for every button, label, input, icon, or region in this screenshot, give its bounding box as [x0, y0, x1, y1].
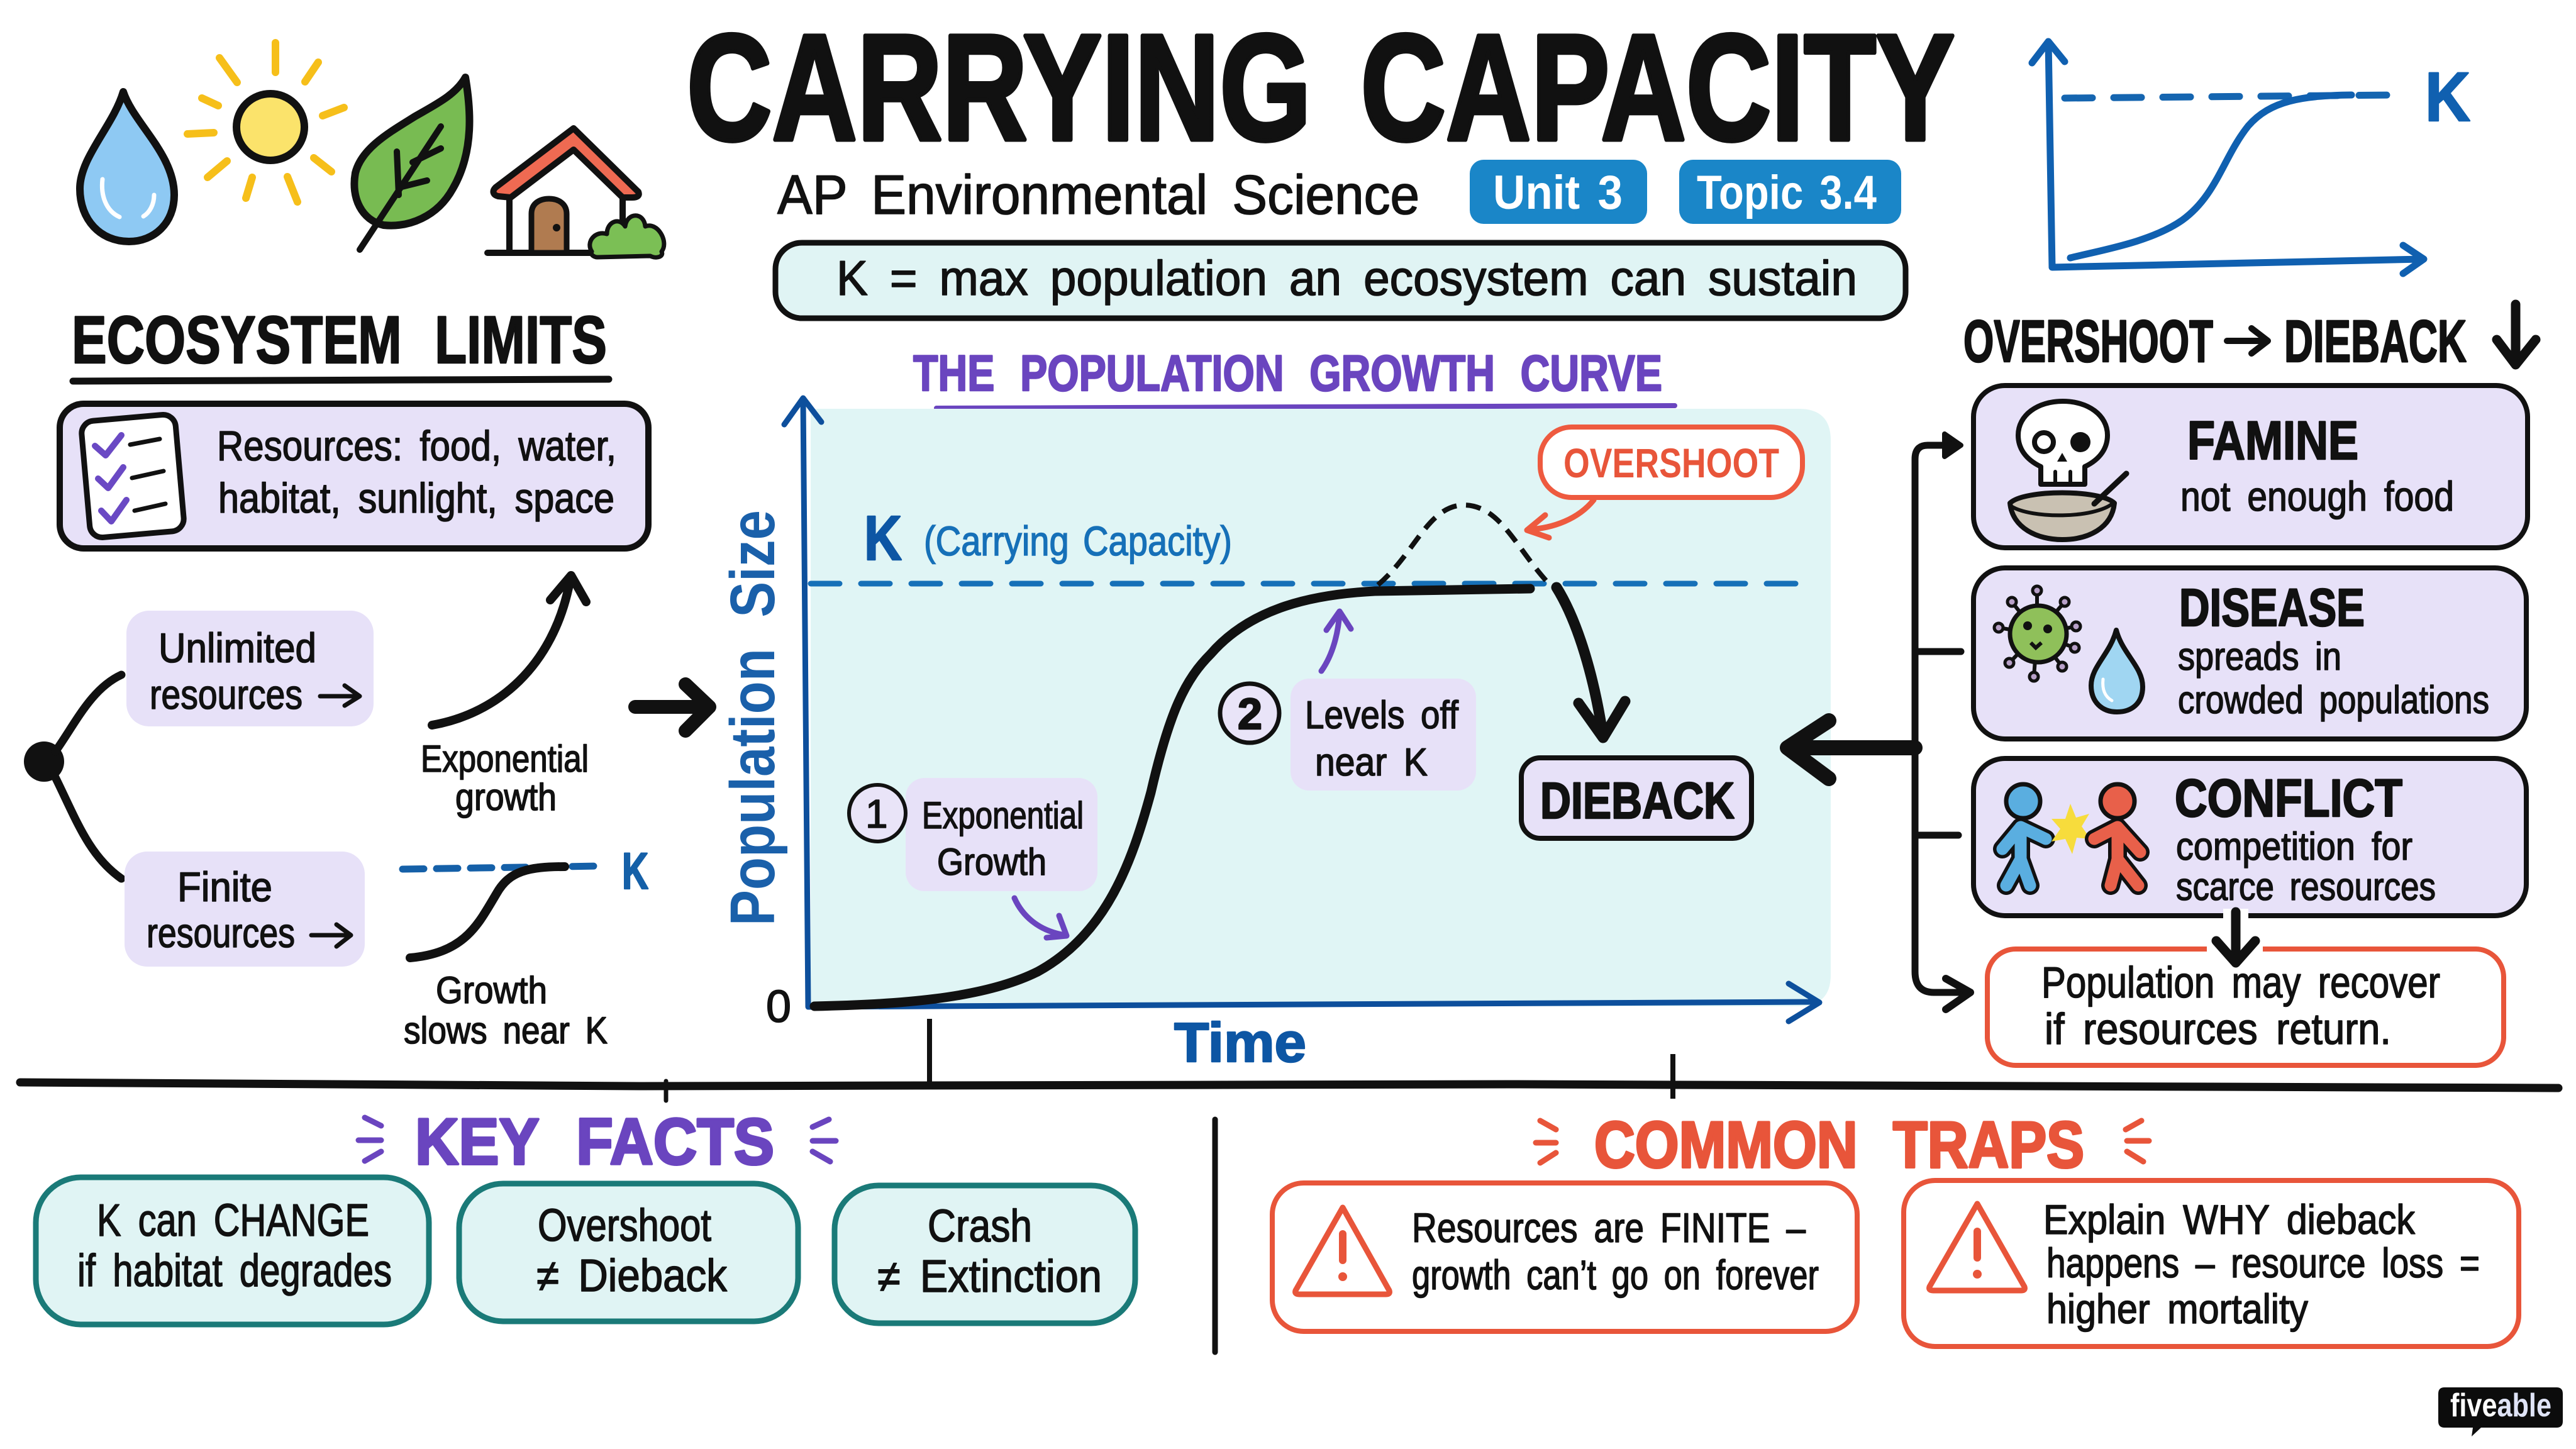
key fact 1: K can CHANGE — [97, 1196, 369, 1246]
panel: conflict: CONFLICT — [2175, 769, 2402, 828]
box: unlimited resources: Unlimited — [158, 625, 316, 671]
key fact 3 — [835, 1185, 1135, 1323]
trap 1: growth can’t go on forever — [1412, 1252, 1819, 1298]
icon: skull and bowl — [2010, 401, 2126, 540]
key fact 2: ≠ Dieback — [536, 1251, 728, 1301]
box: unlimited resources — [126, 611, 374, 726]
panel: famine: not enough food — [2180, 473, 2454, 519]
heading: overshoot to dieback: DIEBACK — [2284, 308, 2467, 375]
callout: recovery: Population may recover — [2041, 958, 2440, 1007]
icon: checklist — [80, 414, 185, 538]
arrow: S curve near K — [402, 843, 648, 1052]
k label: (Carrying Capacity) — [924, 518, 1232, 564]
panel: conflict — [1974, 758, 2526, 916]
subtitle: AP Environmental Science — [777, 164, 1419, 226]
zero label: 0 — [766, 982, 791, 1032]
badge: Unit 3: Unit 3 — [1493, 166, 1623, 219]
fiveable logo: fiveable — [2450, 1387, 2551, 1424]
key fact 1 — [36, 1177, 429, 1324]
icon: virus — [1994, 586, 2080, 681]
heading: overshoot to dieback: OVERSHOOT — [1963, 308, 2213, 375]
k label: K — [864, 503, 902, 574]
panel: disease: DISEASE — [2179, 578, 2365, 637]
title: CARRYING CAPACITY — [687, 3, 1955, 172]
chart: population growth curve — [718, 398, 1831, 1074]
panel: conflict: competition for — [2176, 825, 2412, 869]
arrow: exponential curve: Exponential — [421, 738, 589, 780]
icon: water drop — [80, 92, 174, 242]
heading: key facts: KEY FACTS — [415, 1106, 774, 1179]
panel: disease: crowded populations — [2178, 679, 2489, 722]
overshoot dashed hump — [1378, 505, 1547, 585]
k dashed line — [811, 581, 1797, 586]
key fact 2: Overshoot — [538, 1201, 711, 1251]
definition box: K = max population an ecosystem can sustain — [836, 250, 1857, 306]
overshoot callout — [1527, 427, 1802, 538]
heading: ecosystem limits: ECOSYSTEM LIMITS — [72, 302, 607, 377]
definition box — [775, 243, 1906, 318]
chart tick 2 — [1670, 1054, 1675, 1099]
arrow: S curve near K: Growth — [436, 969, 547, 1011]
key fact 2 — [459, 1184, 798, 1321]
trap 2 — [1904, 1180, 2519, 1346]
vertical divider — [1213, 1119, 1218, 1352]
heading: common traps: COMMON TRAPS — [1594, 1109, 2084, 1182]
arrow: exponential curve: growth — [455, 776, 557, 818]
panel: disease — [1974, 568, 2526, 739]
mini logistic chart — [2032, 42, 2470, 274]
branch connector — [24, 675, 121, 879]
panel: conflict: scarce resources — [2176, 865, 2436, 909]
panel: disease: spreads in — [2178, 635, 2341, 679]
box: finite resources: Finite — [177, 863, 272, 910]
section divider — [20, 1082, 2558, 1088]
icon: spark — [2051, 804, 2090, 854]
arrow: into chart — [635, 684, 709, 731]
overshoot callout: OVERSHOOT — [1563, 440, 1779, 486]
panel: famine: FAMINE — [2187, 411, 2358, 471]
step 2: 2 — [1238, 689, 1262, 738]
callout: recovery: if resources return. — [2045, 1004, 2391, 1053]
step 1: Growth — [937, 841, 1046, 883]
icon: sun — [187, 43, 344, 202]
icon: warning triangle — [1296, 1208, 1389, 1294]
fiveable logo — [2438, 1387, 2563, 1436]
axes — [784, 398, 1819, 1021]
panel: famine — [1974, 386, 2528, 548]
key fact 3: ≠ Extinction — [877, 1252, 1102, 1302]
chart heading: THE POPULATION GROWTH CURVE — [913, 345, 1662, 402]
k label — [864, 503, 1232, 574]
step 1: 1 — [865, 791, 888, 836]
step 2: near K — [1315, 741, 1428, 784]
panel: resources — [60, 404, 648, 548]
step 2: Levels off — [1305, 694, 1459, 737]
icon: house — [487, 128, 664, 257]
growth curve — [814, 589, 1530, 1006]
trap 1 — [1272, 1183, 1857, 1331]
key fact 3: Crash — [928, 1201, 1032, 1252]
callout: recovery — [1987, 943, 2504, 1065]
trap 2: higher mortality — [2046, 1285, 2308, 1332]
dieback box — [1521, 758, 1752, 838]
connector bracket — [1915, 434, 1970, 1009]
chart tick 1 — [927, 1019, 932, 1084]
icon: blue person — [2002, 784, 2046, 886]
y axis label: Population Size — [718, 510, 788, 926]
arrow: exponential curve — [421, 575, 589, 818]
divider tick — [664, 1081, 668, 1101]
step 2 — [1220, 611, 1476, 791]
trap 2: Explain WHY dieback — [2043, 1196, 2416, 1243]
key fact 1: if habitat degrades — [77, 1246, 392, 1296]
icon: warning triangle — [1929, 1204, 2024, 1291]
badge: Unit 3 — [1470, 160, 1647, 224]
arrow: down to recovery — [2216, 909, 2255, 963]
arrow: S curve near K: K — [622, 843, 648, 900]
box: finite resources — [125, 852, 365, 967]
panel: resources: Resources: food, water, — [217, 423, 616, 470]
box: unlimited resources: resources — [150, 671, 303, 718]
step 1 — [849, 778, 1097, 938]
step 1: Exponential — [922, 794, 1084, 836]
arrow: S curve near K: slows near K — [404, 1009, 608, 1052]
trap 2: happens – resource loss = — [2046, 1240, 2480, 1286]
heading: overshoot to dieback — [1963, 304, 2536, 375]
icon: drop — [2091, 630, 2143, 712]
arrow: causes to dieback — [1787, 721, 1915, 779]
badge: Topic 3.4: Topic 3.4 — [1697, 166, 1877, 219]
x axis label: Time — [1174, 1011, 1306, 1074]
icon: leaf — [354, 77, 470, 250]
trap 1: Resources are FINITE – — [1412, 1204, 1806, 1251]
arrow: down to dieback — [1557, 587, 1625, 738]
chart background — [811, 409, 1831, 1006]
box: finite resources: resources — [147, 909, 295, 956]
dieback box: DIEBACK — [1540, 772, 1735, 830]
icon: red person — [2094, 784, 2140, 886]
panel: resources: habitat, sunlight, space — [218, 475, 614, 522]
mini logistic chart: K — [2425, 58, 2470, 136]
